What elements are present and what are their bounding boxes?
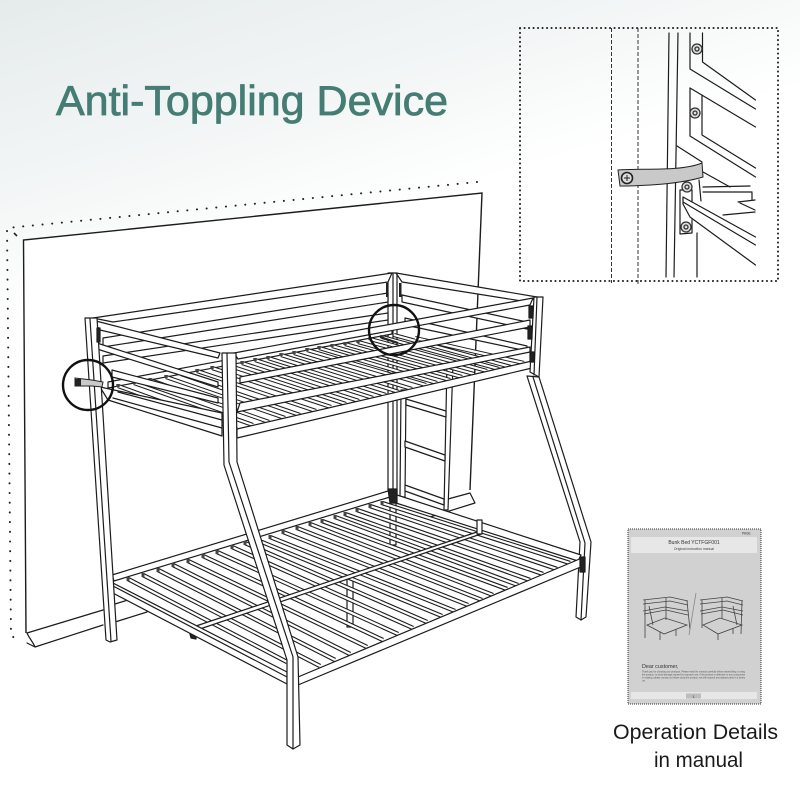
top bunk front rails [92, 298, 533, 438]
rear post and ladder [388, 273, 453, 510]
top bunk back rails [93, 273, 537, 388]
center support bar [190, 520, 482, 639]
detail inset panel [520, 28, 778, 284]
dashed guide lines [612, 28, 638, 284]
bottom brackets [106, 489, 585, 596]
center support legs [347, 503, 396, 627]
inset screw [622, 172, 632, 184]
bottom bunk deck [106, 489, 585, 685]
callout circle: left strap [63, 360, 113, 410]
manual header band [631, 537, 757, 553]
top bunk slats [118, 335, 524, 429]
manual title: Bunk Bed YCTFGF001 [668, 540, 720, 546]
manual bed images [643, 593, 743, 640]
rear bracket details [386, 283, 402, 297]
caption: Operation Details [613, 721, 778, 744]
wall outline with dotted boundary [7, 182, 482, 647]
inset frame drawing [666, 33, 756, 277]
front-right rail [298, 558, 583, 685]
right leg [527, 376, 591, 620]
manual subtitle: Original instruction manual [674, 547, 714, 551]
manual body text: Thank you for choosing our products. Please read this manual carefully before assembling or using [642, 670, 745, 674]
inset strap [618, 163, 703, 186]
front-left rail [107, 580, 287, 684]
rear rails [112, 491, 581, 581]
inset bolts [681, 44, 702, 232]
manual body text: is missing, please contact us before using the product; we will respond and replace parts in a timely [642, 676, 746, 680]
bottom slats [128, 503, 570, 666]
manual footer band [631, 692, 757, 699]
ladder [400, 363, 453, 510]
manual body text [642, 670, 746, 682]
caption [613, 721, 778, 772]
front post [222, 353, 300, 749]
manual thumbnail [628, 529, 761, 704]
left post [85, 318, 117, 642]
right post [528, 297, 543, 377]
manual greeting: Dear customer, [642, 664, 679, 670]
baseboard [27, 493, 475, 647]
callout circle: right anchor [369, 305, 419, 355]
manual body text: us. [642, 680, 646, 682]
manual page number: 1 [692, 694, 695, 699]
manual page tag: PAGE [742, 532, 751, 536]
title: Anti-Toppling Device [56, 77, 448, 124]
bottom slat hooks [128, 501, 382, 581]
manual body text: the product, to avoid damage caused by improper use. If the product is defective or any component [642, 672, 745, 676]
caption: in manual [654, 749, 743, 772]
manual page number [686, 694, 701, 699]
